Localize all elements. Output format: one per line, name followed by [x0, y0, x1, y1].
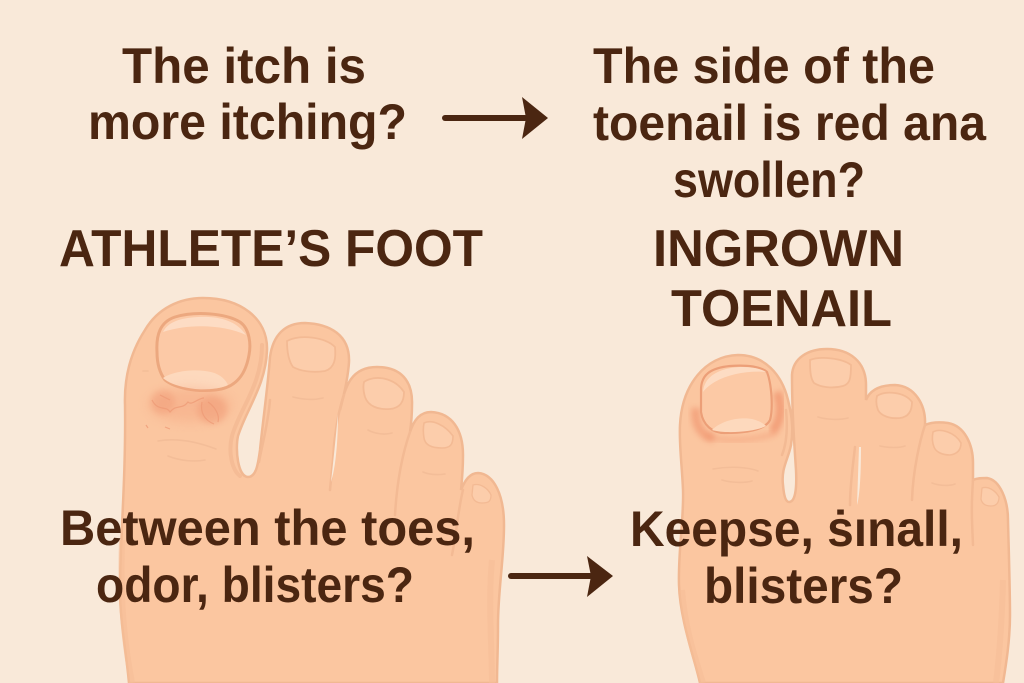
- foot side shading: [682, 580, 1003, 683]
- slit between second and third toes: [331, 414, 338, 482]
- slit between second and third toes: [857, 447, 861, 505]
- question: the itch: The itch is: [122, 38, 366, 94]
- fourth toe nail: [423, 422, 453, 448]
- big toe inner shading: [230, 345, 262, 476]
- third toe nail: [363, 378, 404, 409]
- big toe nail: [157, 314, 250, 391]
- fourth toe nail: [932, 430, 961, 455]
- question: side of the toenail: toenail is red ana: [593, 95, 987, 151]
- question: the itch: [88, 38, 407, 150]
- question: side of the toenail: swollen?: [673, 152, 865, 208]
- heading: ingrown toenail: TOENAIL: [671, 280, 892, 338]
- toe creases: [713, 417, 955, 485]
- fifth toe nail: [472, 485, 491, 503]
- question: keepse small: Keepse, ṡınall,: [630, 501, 963, 557]
- question: the itch: more itching?: [88, 94, 407, 150]
- illustration: foot with athlete's foot: [120, 298, 504, 683]
- third toe nail: [876, 393, 912, 418]
- foot side shading: [121, 540, 492, 683]
- question: keepse small: blisters?: [704, 558, 903, 614]
- question: between the toes: [60, 500, 475, 613]
- toe creases: [143, 371, 445, 475]
- question: keepse small: [630, 501, 963, 614]
- arrow: bottom: [511, 556, 613, 597]
- toe separators: [259, 395, 463, 555]
- question: side of the toenail: [593, 38, 987, 208]
- redness around nail: [696, 392, 780, 440]
- toe separators: [782, 410, 973, 545]
- second toe nail: [810, 358, 851, 387]
- question: between the toes: Between the toes,: [60, 500, 475, 556]
- fifth toe nail: [981, 487, 999, 506]
- heading: athlete's foot: ATHLETE’S FOOT: [59, 220, 483, 278]
- second toe nail: [287, 337, 335, 372]
- rash between toes: [146, 388, 232, 429]
- question: side of the toenail: The side of the: [593, 38, 935, 94]
- illustration: foot with ingrown toenail: [679, 349, 1010, 683]
- question: between the toes: odor, blisters?: [96, 557, 414, 613]
- heading: ingrown toenail: [653, 220, 904, 338]
- heading: ingrown toenail: INGROWN: [653, 220, 904, 278]
- big toe nail: [701, 366, 772, 433]
- arrow: top: [445, 97, 548, 139]
